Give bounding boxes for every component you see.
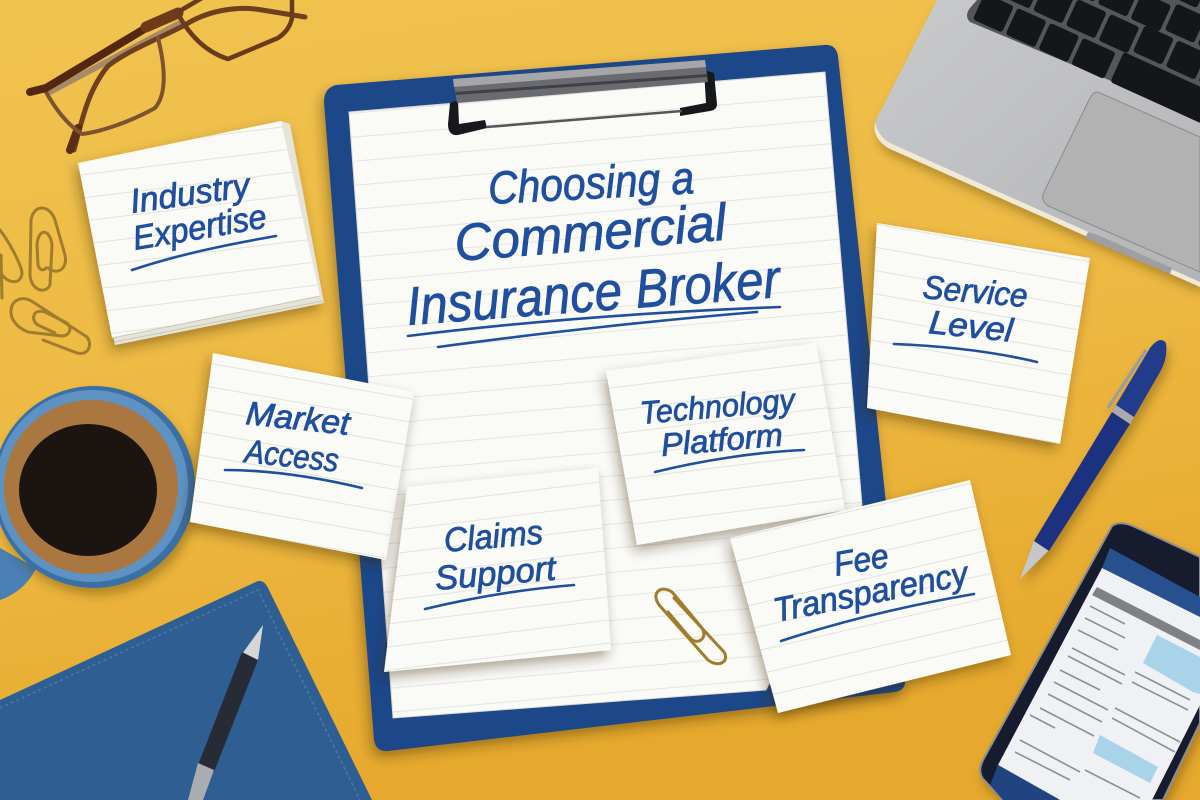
note: Market Access: Market	[244, 394, 353, 442]
icon: paperclips	[0, 208, 90, 354]
note: Service Level	[867, 223, 1090, 444]
note: Industry Expertise	[78, 121, 324, 345]
note: Fee Transparency	[730, 480, 1011, 713]
panel: clipboard	[324, 45, 905, 751]
note: Market Access	[190, 353, 414, 560]
title: Insurance Broker	[404, 249, 784, 337]
note: Industry Expertise: Industry	[128, 166, 254, 221]
title: Commercial	[452, 194, 730, 273]
clipboard paper	[349, 72, 862, 718]
phone screen	[990, 548, 1200, 800]
note: Fee Transparency: Fee	[831, 537, 892, 584]
icon: blue pen	[1020, 340, 1166, 579]
note: Service Level: Level	[927, 303, 1016, 349]
note: Technology Platform	[606, 343, 845, 545]
icon: gold paperclip on clipboard	[656, 589, 726, 664]
note: Industry Expertise: Expertise	[130, 198, 269, 258]
notebook	[0, 581, 372, 800]
icon: smartphone	[980, 523, 1200, 800]
note: Technology Platform: Technology	[638, 381, 798, 431]
note: Service Level: Service	[921, 268, 1029, 314]
icon: pen on notebook	[188, 625, 263, 800]
note: Claims Support: Support	[433, 549, 559, 598]
note: Fee Transparency: Transparency	[770, 555, 973, 630]
title	[404, 151, 784, 347]
clipboard clip	[448, 60, 717, 135]
note: Claims Support	[384, 468, 611, 672]
icon: glasses	[30, 0, 305, 150]
laptop	[875, 0, 1200, 287]
trackpad	[1043, 92, 1200, 272]
keyboard	[967, 0, 1200, 137]
note: Claims Support: Claims	[442, 513, 544, 560]
note: Technology Platform: Platform	[659, 416, 784, 463]
title: Choosing a	[487, 151, 695, 214]
note: Market Access: Access	[242, 432, 341, 479]
icon: coffee cup	[0, 386, 195, 600]
